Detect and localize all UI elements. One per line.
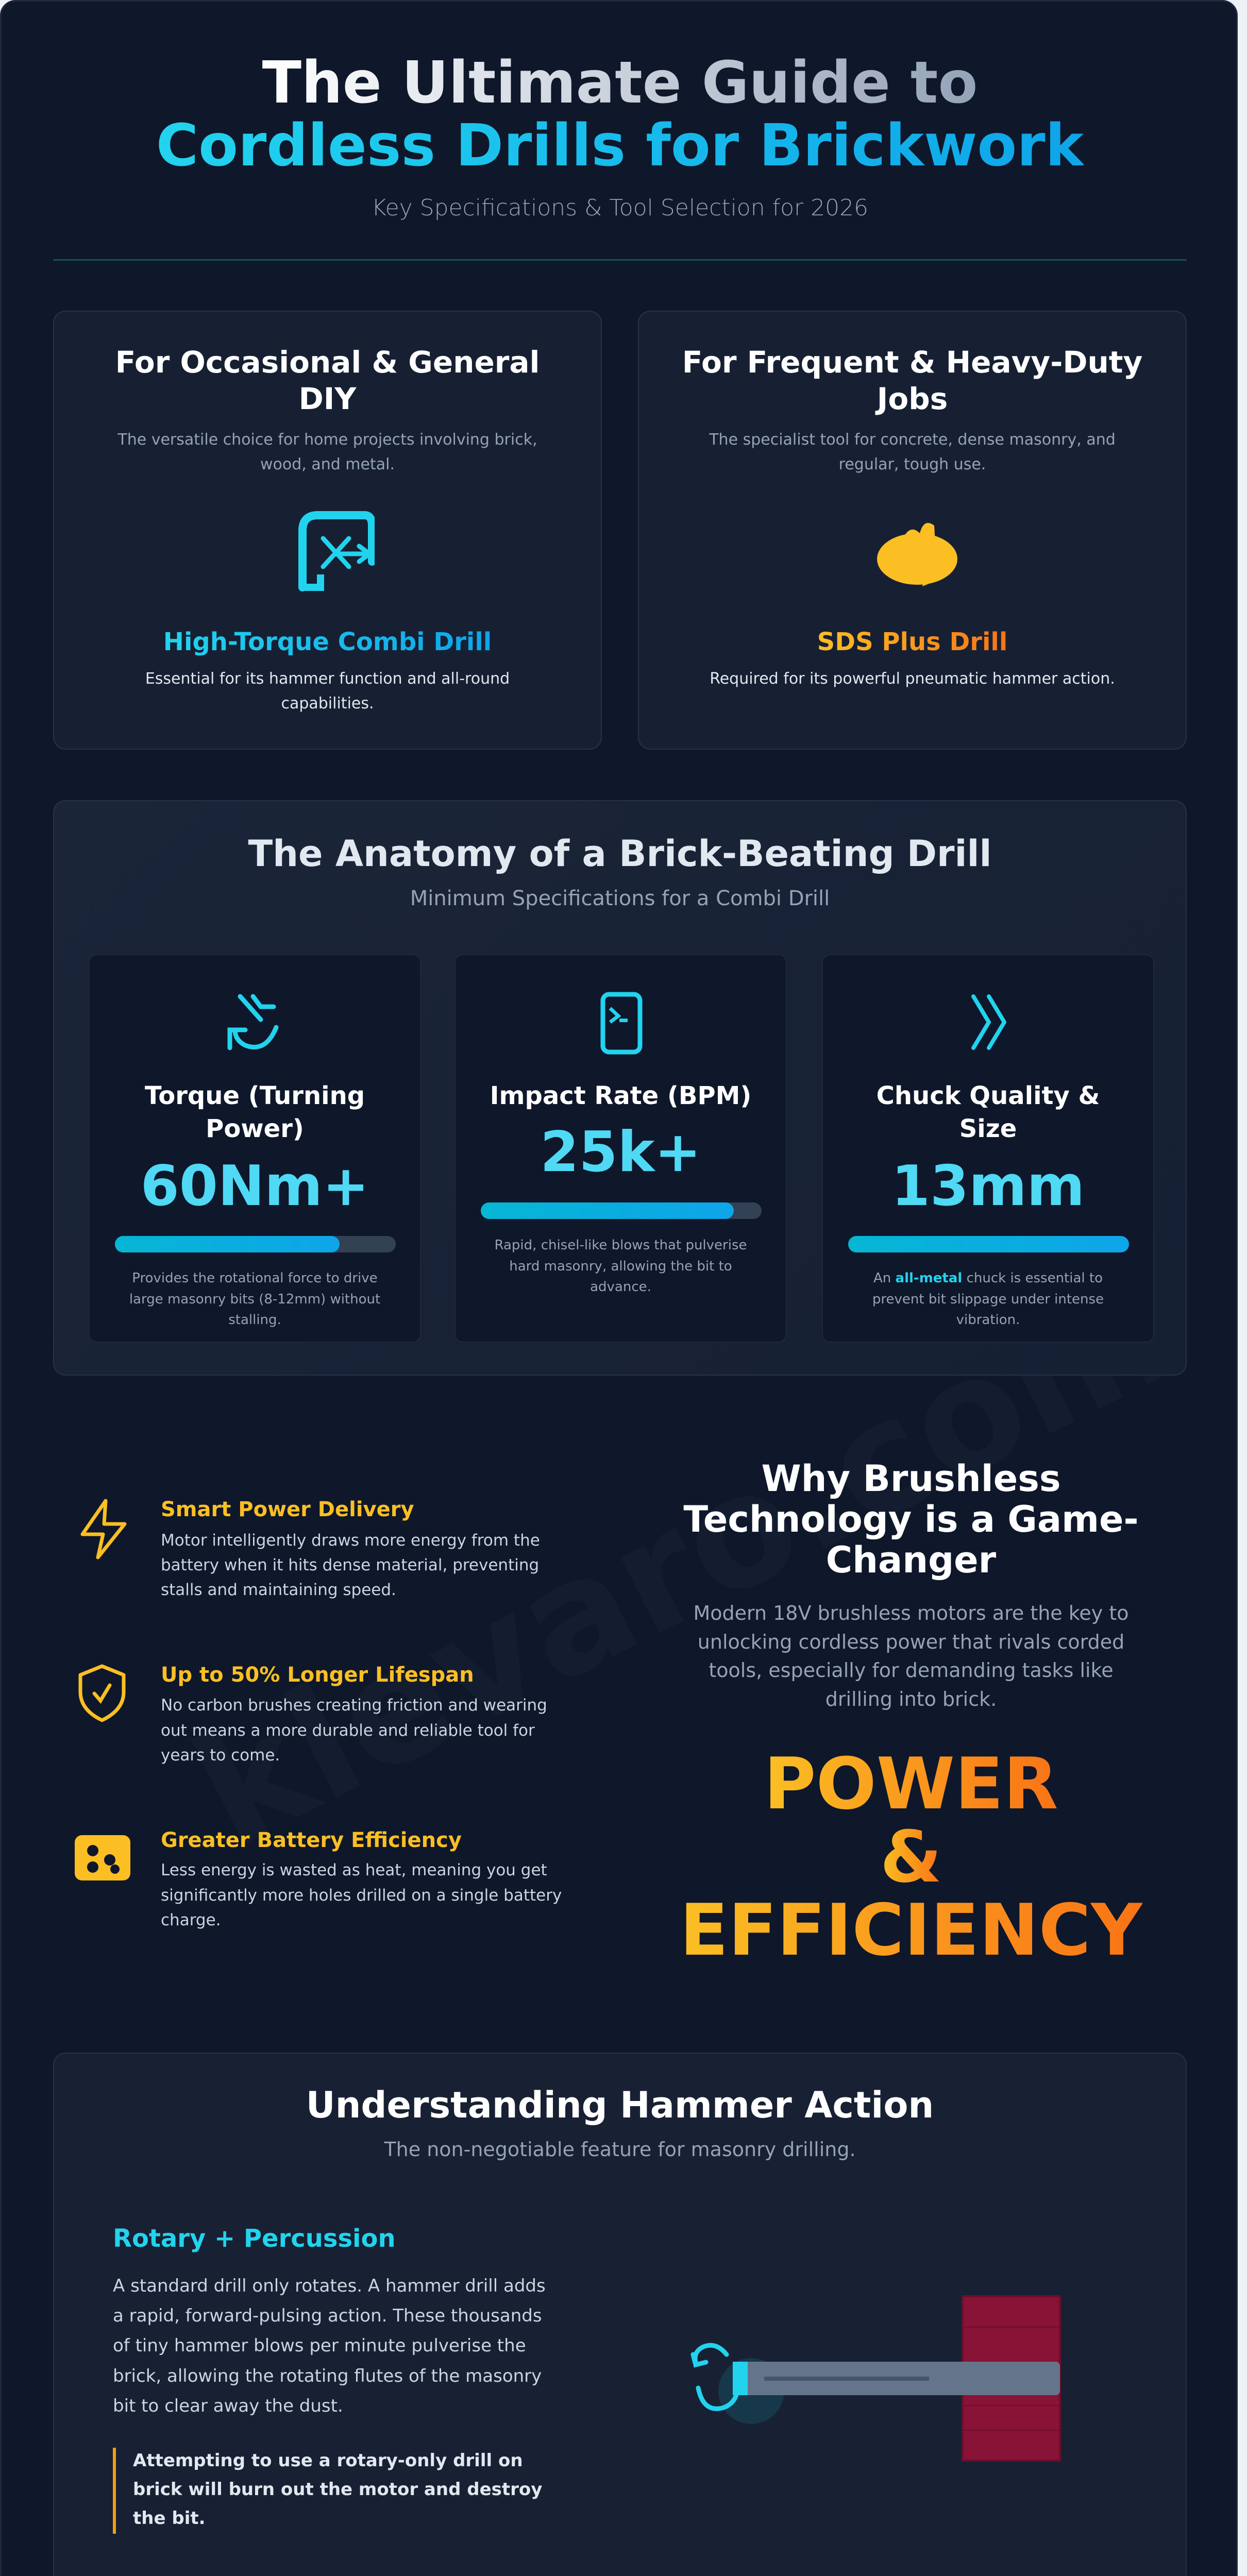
- description: stalling.: [228, 1312, 281, 1328]
- feature: lifespan: [74, 1661, 589, 1764]
- description: Rapid, chisel-like blows that pulverise: [495, 1238, 747, 1253]
- icon: battery: [75, 1835, 130, 1882]
- text: out means a more durable and reliable tool for: [161, 1721, 535, 1739]
- description: The specialist tool for concrete, dense masonry, and: [709, 431, 1116, 449]
- heading: DIY: [299, 381, 356, 416]
- text: years to come.: [161, 1746, 280, 1765]
- big stat: power & efficiency: [653, 1748, 1169, 1967]
- heading: [115, 345, 540, 416]
- text: brushless: Modern 18V brushless motors are the key to: [693, 1602, 1129, 1624]
- title: Chuck Quality &: [877, 1081, 1100, 1110]
- description: Provides the rotational force to drive: [132, 1270, 378, 1286]
- big stat: power & efficiency: POWER: [764, 1742, 1058, 1825]
- title: [156, 49, 1084, 179]
- icon: terminal: [601, 992, 642, 1054]
- heading: For Frequent & Heavy-Duty: [682, 345, 1142, 380]
- text: a rapid, forward-pulsing action. These thousands: [113, 2306, 542, 2326]
- description: advance.: [590, 1279, 651, 1295]
- panel: occasional DIY: [53, 311, 602, 750]
- title: Impact Rate (BPM): [490, 1081, 751, 1110]
- heading: Smart Power Delivery: [161, 1498, 414, 1521]
- description: hard masonry, allowing the bit to: [509, 1258, 732, 1274]
- description: An all-metal chuck is essential to: [873, 1270, 1103, 1286]
- text: battery when it hits dense material, preventing: [161, 1556, 539, 1574]
- panel: hammer action: [53, 2053, 1187, 2576]
- text: brushless: drilling into brick.: [825, 1688, 997, 1710]
- product description: Essential for its hammer function and all-round: [145, 670, 510, 688]
- description: The versatile choice for home projects involving brick,: [117, 431, 537, 449]
- spec card: impact: [454, 954, 787, 1343]
- heading: why brushless: [653, 1459, 1169, 1581]
- text: No carbon brushes creating friction and wearing: [161, 1696, 547, 1715]
- feature: smart power: [74, 1496, 589, 1599]
- callout warning: brick will burn out the motor and destroy: [133, 2479, 542, 2500]
- title: Cordless Drills for Brickwork: [156, 112, 1084, 179]
- watermark: klevaro.com: [167, 1239, 1199, 1883]
- heading: Jobs: [877, 381, 948, 416]
- description: prevent bit slippage under intense: [872, 1291, 1104, 1307]
- text: [113, 2271, 546, 2421]
- product name: High-Torque Combi Drill: [163, 628, 492, 656]
- product description: Required for its powerful pneumatic hammer action.: [710, 670, 1115, 688]
- illustration: drill into brick: [683, 2291, 1064, 2466]
- description: [129, 1270, 380, 1328]
- title: [145, 1081, 365, 1143]
- text: significantly more holes drilled on a single battery: [161, 1886, 562, 1904]
- description: [872, 1270, 1104, 1328]
- bar: [115, 1236, 396, 1252]
- callout warning: Attempting to use a rotary-only drill on: [133, 2450, 523, 2471]
- panel: heavy duty: [638, 311, 1187, 750]
- text: stalls and maintaining speed.: [161, 1581, 396, 1599]
- subtitle: Key Specifications & Tool Selection for 2026: [372, 195, 868, 221]
- text: Less energy is wasted as heat, meaning you get: [161, 1861, 547, 1879]
- text: [161, 1693, 547, 1768]
- title: Power): [206, 1114, 304, 1143]
- text: of tiny hammer blows per minute pulverise the: [113, 2335, 526, 2356]
- value: 25k+: [540, 1120, 701, 1184]
- value: 60Nm+: [141, 1154, 369, 1218]
- heading: [682, 345, 1142, 416]
- heading: Greater Battery Efficiency: [161, 1828, 462, 1852]
- text: charge.: [161, 1911, 221, 1929]
- value: 13mm: [891, 1154, 1085, 1218]
- big stat: power & efficiency: EFFICIENCY: [680, 1889, 1142, 1972]
- description: [709, 431, 1116, 473]
- icon: chevrons: [971, 994, 1006, 1050]
- text: brushless: [653, 1599, 1169, 1714]
- icon: torque: [228, 994, 278, 1050]
- description: large masonry bits (8-12mm) without: [129, 1291, 380, 1307]
- title: The Ultimate Guide to: [262, 49, 978, 116]
- text: [161, 1528, 540, 1602]
- text: A standard drill only rotates. A hammer drill adds: [113, 2276, 546, 2296]
- subtitle: Minimum Specifications for a Combi Drill: [410, 887, 830, 910]
- heading: The Anatomy of a Brick-Beating Drill: [248, 833, 992, 875]
- heading: why brushless: Changer: [826, 1539, 996, 1581]
- description: vibration.: [956, 1312, 1020, 1328]
- bar: [848, 1236, 1129, 1252]
- bar: [481, 1202, 762, 1219]
- icon: shield: [75, 1664, 129, 1723]
- subheading: Rotary + Percussion: [113, 2224, 396, 2253]
- callout warning: the bit.: [133, 2508, 206, 2529]
- title: [877, 1081, 1100, 1143]
- product description: capabilities.: [281, 694, 374, 713]
- text: brushless: unlocking cordless power that rivals corded: [698, 1631, 1124, 1653]
- heading: For Occasional & General: [115, 345, 540, 380]
- text: [161, 1858, 562, 1933]
- icon: lightning: [77, 1498, 129, 1560]
- title: Size: [959, 1114, 1017, 1143]
- spec card: torque: [89, 954, 421, 1343]
- icon: combi drill: [298, 511, 375, 591]
- text: bit to clear away the dust.: [113, 2396, 343, 2416]
- title: Torque (Turning: [145, 1081, 365, 1110]
- description: [495, 1238, 747, 1295]
- heading: why brushless: Why Brushless: [761, 1458, 1061, 1500]
- text: brick, allowing the rotating flutes of the masonry: [113, 2366, 542, 2386]
- text: brushless: tools, especially for demanding tasks like: [709, 1659, 1114, 1682]
- spec card: chuck: [822, 954, 1154, 1343]
- heading: Understanding Hammer Action: [306, 2084, 934, 2126]
- panel: anatomy: [53, 800, 1187, 1376]
- description: wood, and metal.: [260, 455, 395, 473]
- feature: battery: [74, 1826, 589, 1929]
- heading: why brushless: Technology is a Game-: [683, 1498, 1139, 1540]
- text: Motor intelligently draws more energy from the: [161, 1531, 540, 1550]
- product name: SDS Plus Drill: [817, 628, 1007, 656]
- product description: [145, 670, 510, 713]
- description: regular, tough use.: [839, 455, 986, 473]
- callout warning: [113, 2448, 577, 2534]
- description: [117, 431, 537, 473]
- subtitle: The non-negotiable feature for masonry drilling.: [384, 2138, 856, 2161]
- big stat: power & efficiency: &: [880, 1816, 942, 1899]
- heading: Up to 50% Longer Lifespan: [161, 1663, 474, 1687]
- icon: SDS drill: [877, 523, 957, 586]
